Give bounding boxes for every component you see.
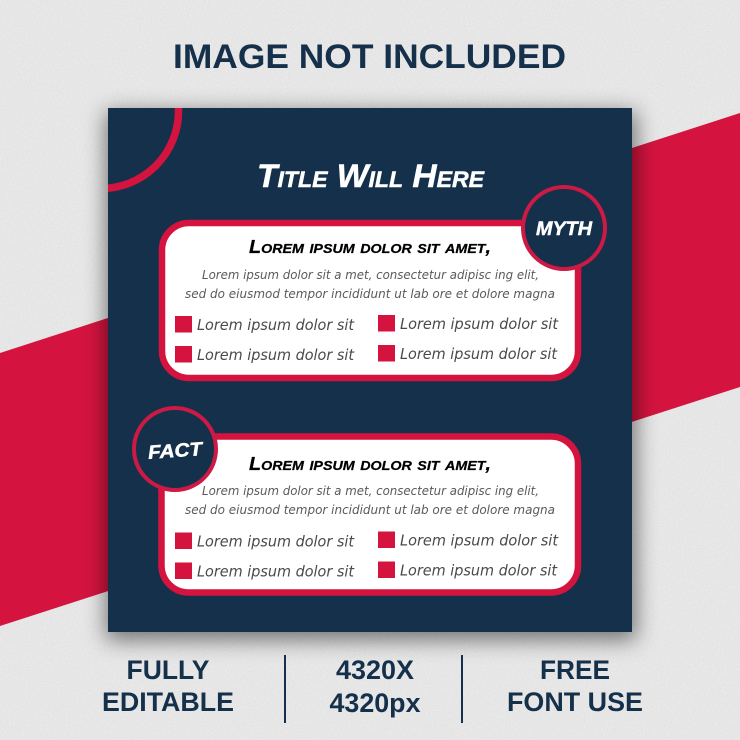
fact description	[185, 484, 555, 517]
footer: fully editable: EDITABLE	[102, 687, 234, 717]
fact bullet list: Lorem ipsum dolor sit	[197, 532, 355, 550]
fact description: Lorem ipsum dolor sit a met, consectetur adipisc ing elit,	[202, 484, 539, 498]
myth badge: MYTH	[536, 219, 593, 240]
myth description: Lorem ipsum dolor sit a met, consectetur adipisc ing elit,	[202, 268, 539, 282]
fact bullet list	[175, 532, 559, 580]
myth bullet list: Lorem ipsum dolor sit	[400, 345, 558, 363]
myth panel box	[162, 223, 578, 378]
footer: size: 4320px	[330, 688, 420, 718]
card title: Title Will Here	[257, 158, 485, 194]
panel: fact	[134, 408, 578, 592]
myth bullet list: Lorem ipsum dolor sit	[197, 346, 355, 364]
footer: fully editable	[102, 655, 234, 717]
fact badge	[134, 408, 216, 490]
fact panel heading: Lorem ipsum dolor sit amet,	[249, 454, 491, 474]
myth panel heading: Lorem ipsum dolor sit amet,	[249, 237, 491, 257]
card shadow	[106, 112, 636, 640]
myth badge	[523, 187, 605, 269]
myth description: sed do eiusmod tempor incididunt ut lab ore et dolore magna	[185, 287, 555, 301]
fact bullet list: Lorem ipsum dolor sit	[400, 562, 558, 580]
panel: myth	[162, 187, 605, 378]
footer: fully editable: FULLY	[126, 655, 210, 685]
footer: size: 4320X	[336, 655, 414, 685]
fact bullet list: Lorem ipsum dolor sit	[400, 532, 559, 550]
footer: free font use: FREE	[540, 655, 610, 685]
myth bullet list: Lorem ipsum dolor sit	[197, 316, 355, 334]
footer: free font use	[507, 655, 643, 717]
fact panel box	[162, 436, 578, 592]
myth description	[185, 268, 555, 301]
myth bullet list: Lorem ipsum dolor sit	[400, 315, 559, 333]
fact badge: FACT	[147, 439, 204, 464]
fact description: sed do eiusmod tempor incididunt ut lab ore et dolore magna	[185, 503, 555, 517]
main navy card	[108, 108, 632, 632]
myth bullet list	[175, 315, 559, 364]
heading: image not included: IMAGE NOT INCLUDED	[173, 38, 566, 76]
footer: size	[330, 655, 420, 718]
corner arc	[108, 108, 182, 192]
fact bullet list: Lorem ipsum dolor sit	[197, 562, 355, 580]
red diagonal band	[0, 113, 740, 626]
footer: free font use: FONT USE	[507, 687, 643, 717]
